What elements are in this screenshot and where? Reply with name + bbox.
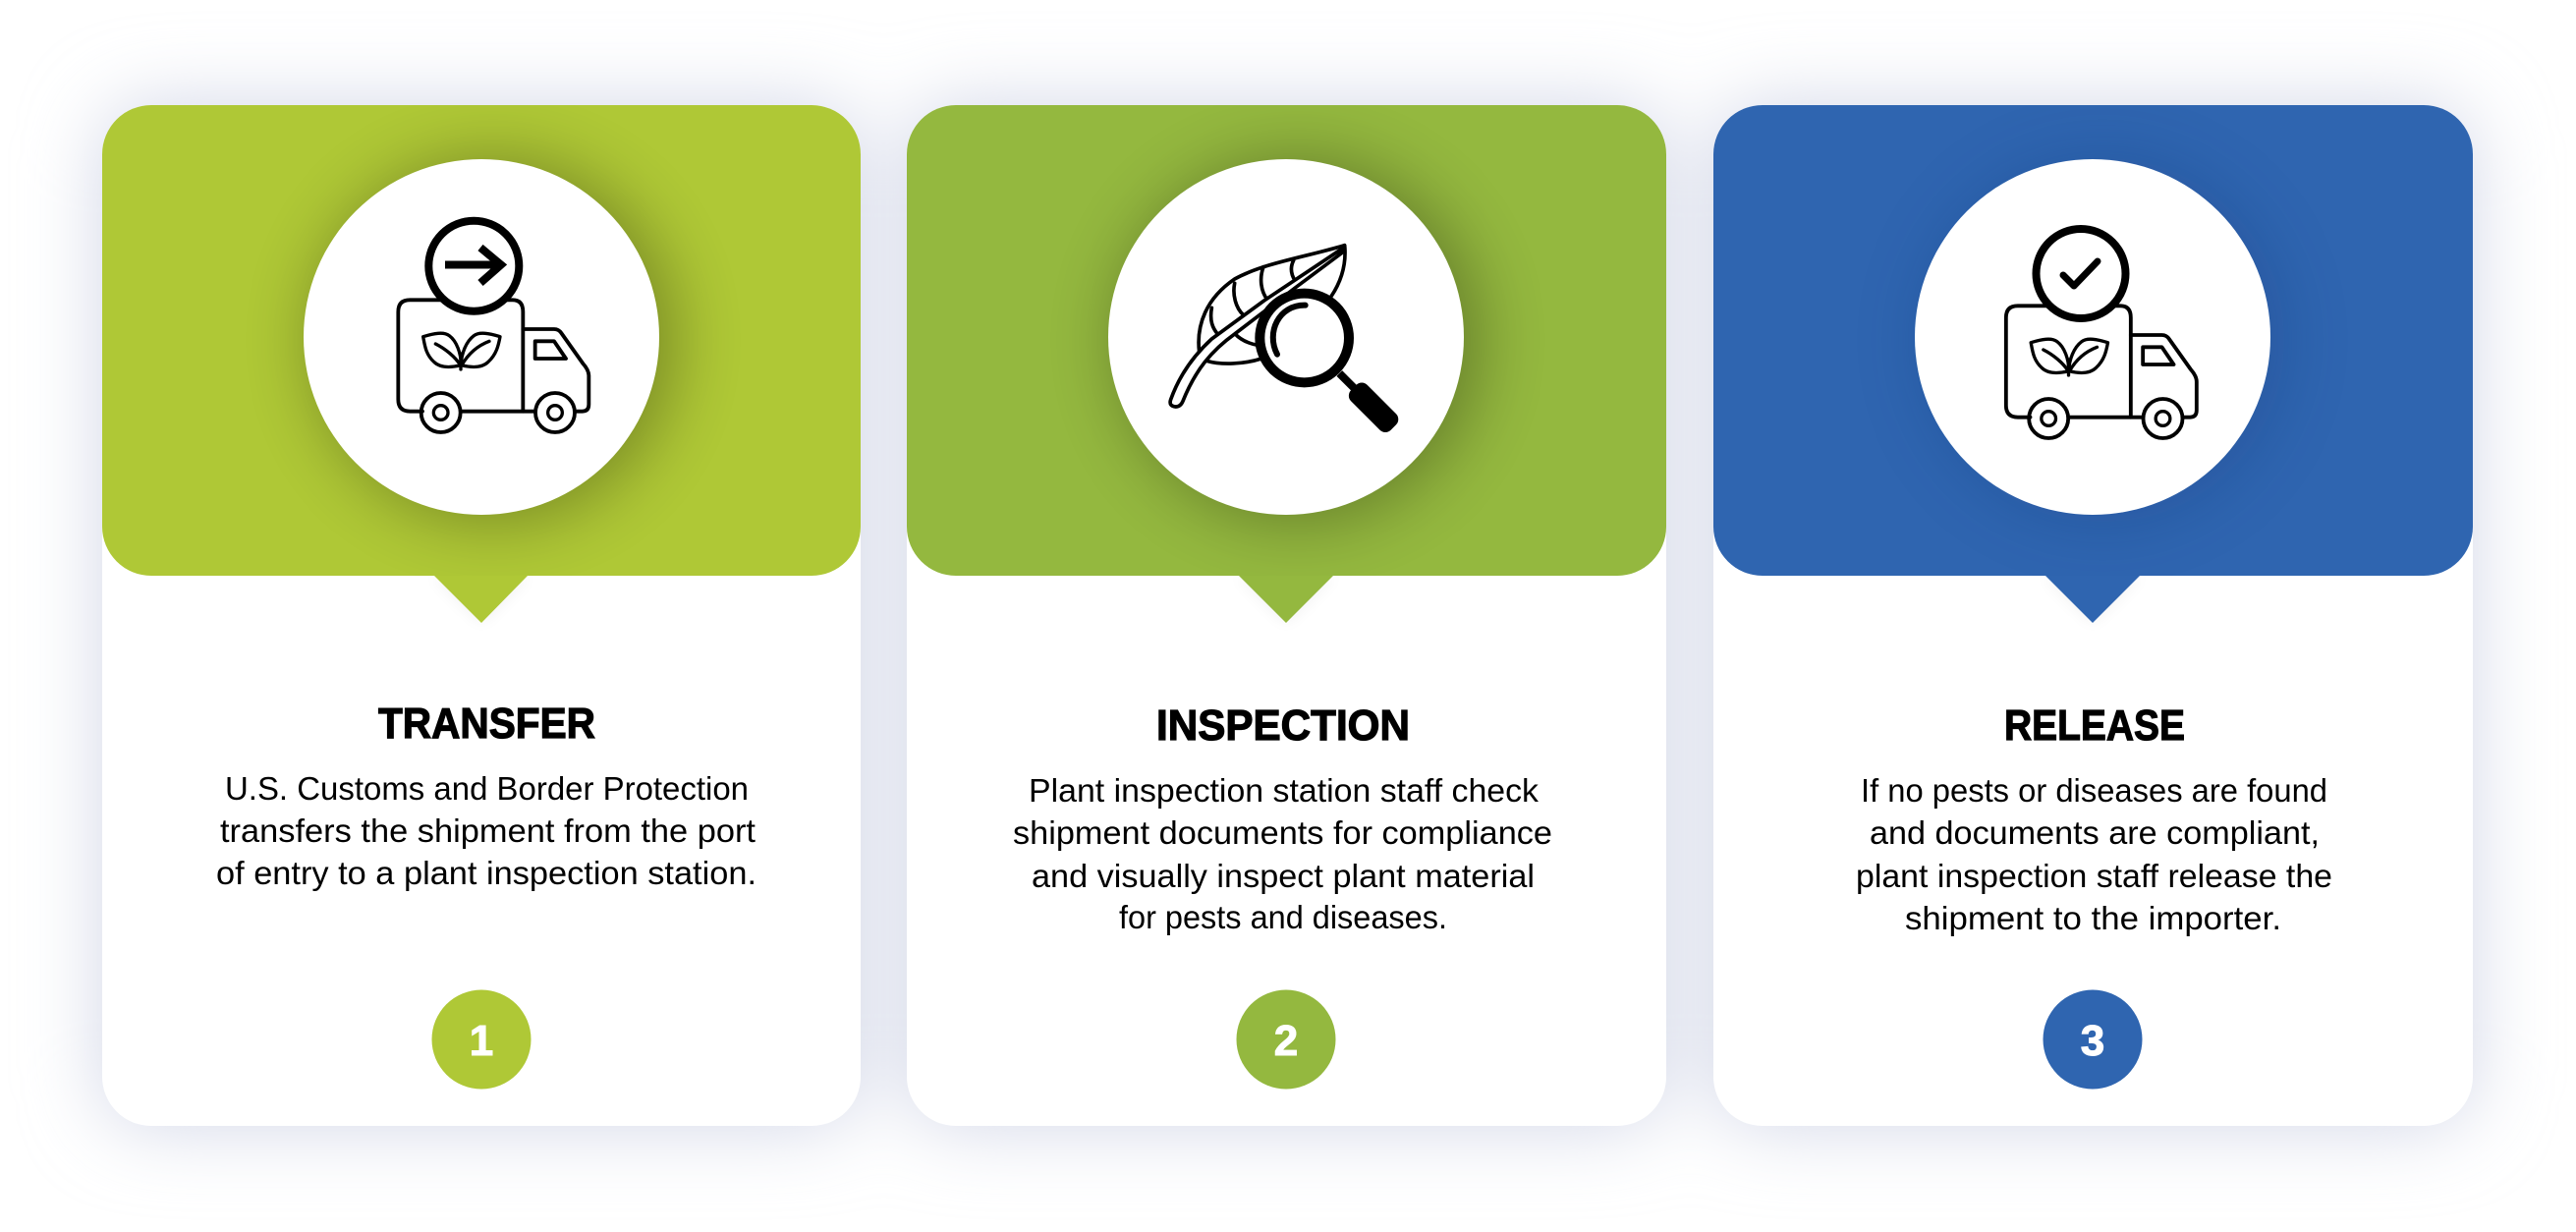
body text: and documents are compliant, — [1870, 814, 2320, 851]
pointer shadow — [1238, 576, 1334, 623]
card body — [907, 105, 1666, 1126]
panel: step 2 inspection — [907, 105, 1666, 1126]
heading: INSPECTION — [1156, 701, 1410, 750]
icon circle shadow — [310, 157, 676, 523]
body text: U.S. Customs and Border Protection — [225, 770, 749, 807]
header band — [1713, 105, 2473, 576]
heading: RELEASE — [2004, 701, 2185, 750]
body text — [1856, 772, 2332, 936]
step number 1: 1 — [470, 1017, 493, 1065]
header pointer — [1238, 575, 1334, 623]
icon circle shadow — [2079, 181, 2279, 517]
truck with plant — [398, 300, 588, 432]
soft background shadow behind cards — [102, 105, 2473, 1126]
body text: and visually inspect plant material — [1032, 858, 1535, 894]
header pointer — [433, 575, 529, 623]
pointer shadow — [2044, 576, 2141, 623]
body text: shipment to the importer. — [1905, 900, 2281, 936]
body text: transfers the shipment from the port — [220, 812, 756, 849]
icon: delivery truck with leaf and arrow — [398, 221, 588, 432]
icon circle — [1915, 159, 2270, 515]
body text: If no pests or diseases are found — [1861, 772, 2327, 809]
body text: of entry to a plant inspection station. — [216, 855, 756, 891]
header pointer — [2044, 575, 2141, 623]
icon: delivery truck with leaf and check mark — [2006, 229, 2197, 438]
status circle with check mark — [2036, 229, 2126, 318]
leaf outline and veins — [1170, 246, 1345, 407]
body text: Plant inspection station staff check — [1029, 772, 1540, 809]
icon circle — [304, 159, 659, 515]
step number 3 — [2044, 990, 2142, 1089]
step number 2: 2 — [1274, 1017, 1298, 1065]
card body — [102, 105, 861, 1126]
icon: leaf under magnifying glass — [1170, 246, 1402, 435]
step number 2 — [1236, 990, 1336, 1089]
icon circle — [1108, 159, 1464, 515]
header band — [102, 105, 861, 576]
pointer shadow — [433, 576, 529, 623]
panel: step 1 transfer — [102, 105, 861, 1126]
truck with plant — [2006, 306, 2197, 438]
icon circle shadow — [1115, 157, 1481, 523]
card body — [1713, 105, 2473, 1126]
body text — [1013, 772, 1552, 935]
step number 1 — [432, 990, 531, 1089]
panel: step 3 release — [1713, 105, 2473, 1126]
header band — [907, 105, 1666, 576]
body text — [216, 770, 756, 891]
heading: TRANSFER — [378, 700, 595, 748]
body text: plant inspection staff release the — [1856, 858, 2332, 894]
step number 3: 3 — [2081, 1017, 2104, 1065]
body text: shipment documents for compliance — [1013, 814, 1552, 851]
body text: for pests and diseases. — [1119, 899, 1447, 935]
status circle with arrow — [428, 221, 519, 311]
magnifying glass — [1260, 294, 1402, 435]
